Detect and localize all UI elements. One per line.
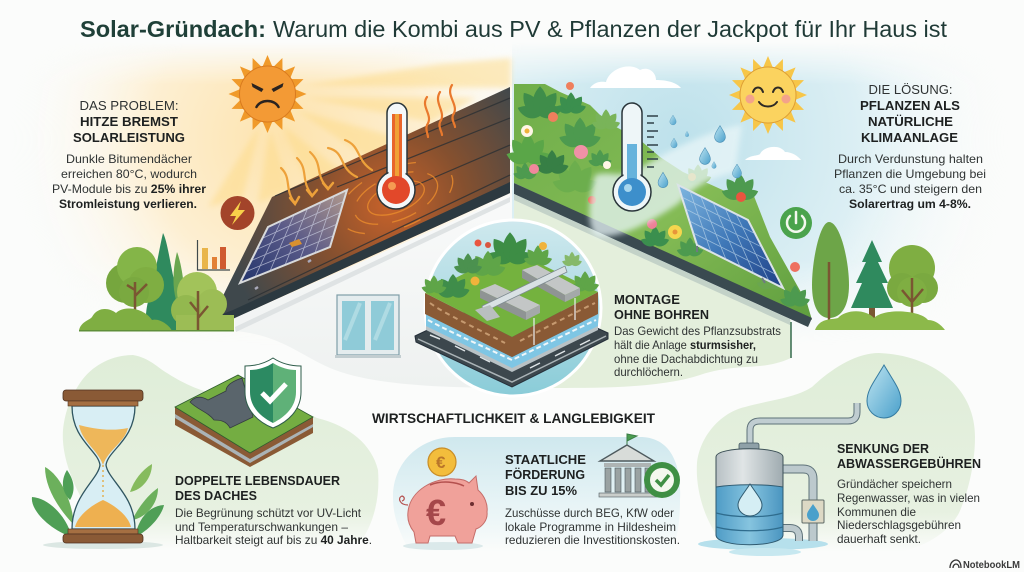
icon: water droplets: [658, 115, 742, 188]
icon: roof block with shield: [175, 358, 313, 467]
sun rays: [208, 58, 511, 207]
text: funding: lokale Programme in Hildesheim: [505, 520, 676, 534]
water meter: [802, 500, 824, 523]
text: rainwater: ABWASSERGEBÜHREN: [837, 456, 981, 471]
text: rainwater: dauerhaft senkt.: [837, 532, 921, 546]
text: problem: SOLARLEISTUNG: [73, 130, 185, 145]
happy sun: [729, 56, 807, 134]
text: problem: erreichen 80°C, wodurch: [61, 167, 197, 181]
icon: rainwater tank: [698, 403, 857, 556]
icon: hourglass: [32, 390, 164, 549]
trees right: [812, 222, 945, 330]
text: lifespan: und Temperaturschwankungen –: [175, 520, 348, 534]
text: lifespan: Die Begrünung schützt vor UV-Licht: [175, 506, 362, 520]
plants on roof: [505, 86, 811, 309]
green roof: [505, 82, 812, 327]
panel: mounting cross-section: [415, 220, 608, 396]
icon: piggy bank: €: [436, 453, 446, 472]
wall edge line: [790, 322, 792, 358]
icon: approval badge: [644, 462, 680, 498]
house wall: left: [235, 195, 512, 388]
text: solution: KLIMAANLAGE: [861, 130, 958, 145]
text: rainwater: SENKUNG DER: [837, 441, 930, 456]
text: lifespan: DOPPELTE LEBENSDAUER: [175, 473, 341, 488]
icon: heat arrows: [281, 140, 372, 204]
text: funding: [505, 452, 680, 547]
section heading: WIRTSCHAFTLICHKEIT & LANGLEBIGKEIT: [372, 410, 655, 426]
text: funding: reduzieren die Investitionskosten.: [505, 533, 680, 547]
text: lifespan: [175, 473, 372, 547]
rail: [482, 266, 567, 312]
icon: government building: [599, 434, 680, 498]
icon: piggy bank: [400, 448, 487, 550]
icon: big water drop: [867, 365, 901, 418]
plants: [421, 232, 600, 300]
icon: hot thermometer: [377, 103, 415, 209]
text: rainwater: [837, 441, 981, 546]
text: mounting: hält die Anlage sturmsisher,: [614, 338, 756, 352]
text: problem: [52, 98, 206, 211]
blob: rainwater: [697, 353, 975, 552]
icon: cool thermometer: [613, 103, 658, 211]
text: problem: Dunkle Bitumendächer: [66, 152, 192, 166]
clouds: [590, 66, 801, 160]
text: solution: ca. 35°C und steigern den: [839, 182, 982, 196]
text: funding: FÖRDERUNG: [505, 467, 585, 482]
title: Solar-Gründach:: [80, 16, 266, 42]
text: mounting: MONTAGE: [614, 292, 680, 307]
icon: piggy bank: €: [426, 492, 446, 533]
text: lifespan: Haltbarkeit steigt auf bis zu 40 Jahre.: [175, 533, 372, 547]
text: solution: DIE LÖSUNG:: [868, 82, 952, 97]
text: mounting: durchlöchern.: [614, 365, 683, 379]
heat ripples: [329, 148, 463, 248]
icon: power badge: [780, 207, 812, 239]
text: solution: NATÜRLICHE: [868, 114, 953, 129]
plants: [32, 464, 164, 537]
text: funding: Zuschüsse durch BEG, KfW oder: [505, 506, 674, 520]
pipes: [750, 403, 857, 541]
text: solution: Durch Verdunstung halten: [838, 152, 983, 166]
text: rainwater: Kommunen die: [837, 505, 916, 519]
text: problem: DAS PROBLEM:: [80, 98, 178, 113]
text: mounting: OHNE BOHREN: [614, 307, 709, 322]
blob: lifespan: [63, 355, 378, 551]
grass: [425, 250, 598, 337]
layers: [426, 320, 598, 372]
text: problem: Stromleistung verlieren.: [59, 197, 197, 211]
problem roof: [212, 87, 510, 332]
cooled solar panel: [678, 185, 783, 288]
text: solution: PFLANZEN ALS: [860, 98, 960, 113]
sky backgrounds: [70, 48, 936, 310]
icon: falling bar chart: [198, 240, 230, 270]
text: funding: BIS ZU 15%: [505, 483, 577, 498]
text: lifespan: DES DACHES: [175, 488, 257, 503]
text: problem: PV-Module bis zu 25% ihrer: [52, 182, 206, 196]
text: rainwater: Gründächer speichern: [837, 477, 952, 491]
angry sun: [228, 55, 306, 133]
house wall: right: [514, 195, 791, 388]
text: mounting: [614, 292, 781, 379]
blob: funding: [393, 437, 680, 552]
icon: lightning badge: [220, 196, 254, 230]
trees left: [79, 233, 234, 332]
text: rainwater: Regenwasser, was in vielen: [837, 491, 980, 505]
icon: rising heat waves: [425, 85, 455, 137]
text: mounting: Das Gewicht des Pflanzsubstrats: [614, 324, 781, 338]
flowers: [521, 82, 800, 272]
text: funding: STAATLICHE: [505, 452, 586, 467]
pavers: [480, 284, 540, 312]
base slab: [415, 290, 608, 387]
overheated solar panel: [240, 190, 347, 289]
text: solution: [834, 82, 986, 211]
evaporation swoosh: [589, 125, 742, 237]
text: solution: Solarertrag um 4-8%.: [849, 197, 971, 211]
text: solution: Pflanzen die Umgebung bei: [834, 167, 986, 181]
text: problem: HITZE BREMST: [80, 114, 178, 129]
title: Warum die Kombi aus PV & Pflanzen der Jackpot für Ihr Haus ist: [273, 16, 948, 42]
roots: [534, 298, 575, 345]
text: mounting: ohne die Dachabdichtung zu: [614, 352, 758, 366]
window: [335, 295, 401, 358]
text: rainwater: Niederschlagsgebühren: [837, 518, 961, 532]
